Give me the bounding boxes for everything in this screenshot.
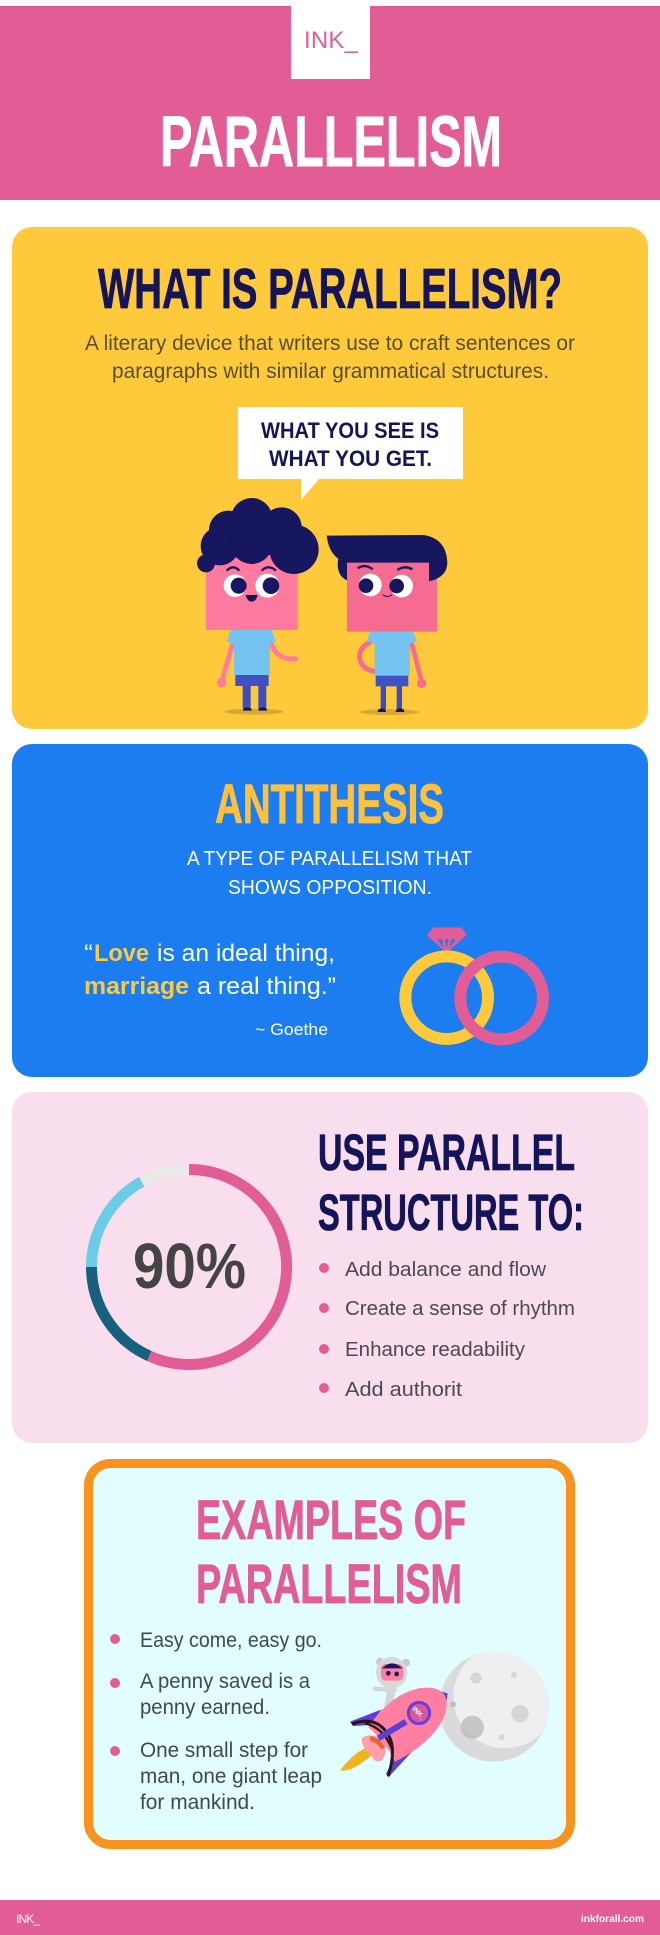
rocket — [340, 1688, 448, 1777]
donut chart 90%: 90% — [133, 1230, 246, 1302]
bullet list: Add authorit — [345, 1378, 462, 1401]
footer bar — [0, 1900, 660, 1935]
moon — [441, 1652, 549, 1762]
title: PARALLELISM — [160, 103, 502, 182]
description: A TYPE OF PARALLELISM THAT — [187, 848, 472, 870]
quote: ~ Goethe — [255, 1020, 328, 1039]
panel: what is parallelism — [12, 227, 648, 729]
quote: “ — [84, 940, 93, 967]
bullet list: Create a sense of rhythm — [345, 1297, 575, 1320]
examples list: One small step for — [140, 1739, 308, 1762]
header banner — [0, 6, 660, 200]
illustration: two characters — [197, 498, 447, 715]
examples list: Easy come, easy go. — [140, 1629, 322, 1652]
heading: EXAMPLES OF — [196, 1489, 466, 1551]
footer logo: INK_ — [16, 1912, 40, 1926]
bullet list: Add balance and flow — [345, 1258, 546, 1281]
heading: ANTITHESIS — [215, 773, 444, 835]
heading — [318, 1124, 584, 1241]
quote: marriage — [84, 973, 189, 1000]
icon: wedding rings — [405, 927, 543, 1039]
definition text: A literary device that writers use to craft sentences or — [85, 332, 575, 355]
bullet list: Enhance readability — [345, 1338, 526, 1361]
heading — [196, 1489, 466, 1615]
rocket: INK_ — [411, 1706, 426, 1722]
quote — [84, 940, 336, 1039]
heading: PARALLELISM — [196, 1553, 462, 1615]
illustration: rocket, astronaut and moon — [340, 1645, 557, 1777]
character: swept hair — [327, 535, 447, 715]
astronaut — [375, 1657, 410, 1708]
panel: examples of parallelism — [88, 1464, 570, 1844]
speech bubble: WHAT YOU GET. — [269, 446, 432, 471]
examples list — [110, 1629, 322, 1814]
speech bubble — [238, 407, 463, 500]
logo box — [291, 6, 370, 79]
examples list: penny earned. — [140, 1696, 270, 1719]
logo box: INK_ — [304, 27, 359, 54]
examples list: man, one giant leap — [140, 1765, 322, 1788]
definition text — [85, 332, 575, 383]
quote: Love — [94, 940, 149, 967]
examples list: A penny saved is a — [140, 1670, 310, 1693]
footer url: inkforall.com — [581, 1913, 644, 1925]
description: SHOWS OPPOSITION. — [228, 877, 432, 899]
donut chart 90% — [92, 1170, 287, 1364]
character: curly hair — [197, 498, 319, 715]
description — [187, 848, 472, 899]
quote: a real thing.” — [197, 973, 336, 1000]
panel: use parallel structure — [12, 1092, 648, 1443]
bullet list — [319, 1258, 575, 1401]
quote: is an ideal thing, — [157, 940, 335, 967]
definition text: paragraphs with similar grammatical structures. — [112, 360, 549, 383]
panel: antithesis — [12, 744, 648, 1077]
examples list: for mankind. — [140, 1791, 255, 1814]
speech bubble: WHAT YOU SEE IS — [261, 418, 439, 443]
